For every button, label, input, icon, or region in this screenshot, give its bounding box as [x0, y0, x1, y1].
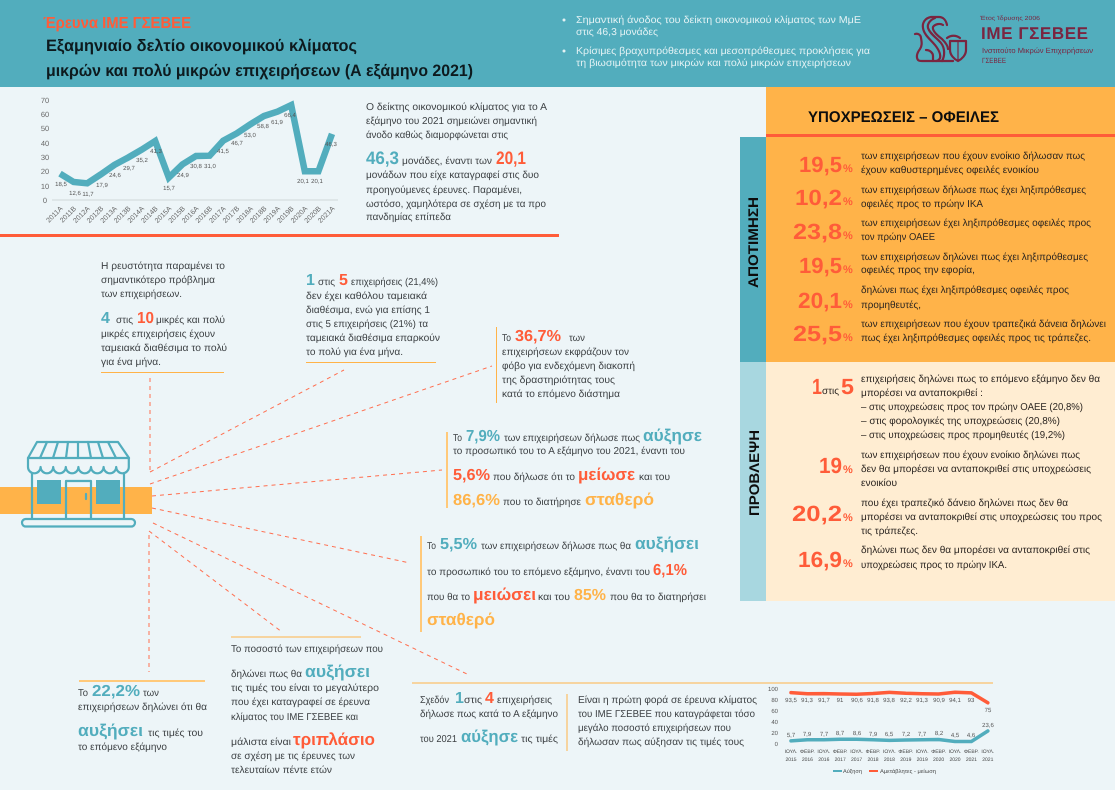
stat 1 in 5 cannot meet obligations — [812, 374, 1100, 441]
side tab: assessment — [740, 137, 766, 362]
line chart: economic climate index: 30,8 — [190, 163, 202, 170]
text block: staffing first half 2021: Το — [453, 433, 462, 444]
line chart: price changes: 2021 — [982, 757, 994, 763]
text block: almost 1 in 4 raised prices: Σχεδόν — [420, 695, 449, 706]
line chart: economic climate index: 2012B — [86, 205, 105, 225]
stat 25,5% banks: % — [843, 332, 853, 344]
text block: staffing first half 2021: και του — [639, 472, 670, 483]
stat 19% rent: % — [843, 464, 853, 476]
line chart: economic climate index: 46,3 — [325, 141, 337, 148]
line chart: economic climate index: 70 — [41, 96, 49, 105]
text block: almost 1 in 4 raised prices: επιχειρήσεις — [497, 695, 552, 706]
line chart: price changes: 23,6 — [982, 722, 994, 729]
text block: highest recorded price rises: τις τιμές του είναι το μεγαλύτερο — [231, 683, 379, 694]
text block: almost 1 in 4 raised prices — [420, 690, 558, 746]
title — [46, 37, 473, 80]
stat 1 in 5 cannot meet obligations: – στις φορολογικές της υποχρεώσεις (20,8%) — [861, 416, 1060, 427]
text block: highest recorded price rises: σε σχέση με τις έρευνες των — [231, 751, 355, 762]
line chart: price changes: ΦΕΒΡ. — [833, 749, 848, 755]
line chart: price changes: 20 — [771, 730, 779, 737]
text block: liquidity: Η ρευστότητα παραμένει το — [101, 261, 225, 272]
icon: storefront — [22, 442, 135, 526]
chart legend — [833, 768, 936, 775]
stat 1 in 5 cannot meet obligations: μπορέσει να ανταποκριθεί : — [861, 388, 983, 399]
stat 19,5% tax: των επιχειρήσεων δηλώνει πως έχει ληξιπρόθεσμες — [861, 252, 1088, 263]
text block: highest recorded price rises: μάλιστα είναι — [231, 737, 291, 748]
stat 19% rent: των επιχειρήσεων που έχουν ενοίκιο δηλώνει πως — [861, 450, 1080, 461]
line chart: economic climate index: 2011B — [59, 205, 78, 224]
text block: 1 in 5 no cash: 5 — [339, 272, 348, 289]
text block: 22,2% will raise prices — [78, 680, 207, 753]
stat 20,2% bank loans: % — [843, 512, 853, 524]
stat 1 in 5 cannot meet obligations: 5 — [841, 374, 854, 399]
text block: first time in climate survey: του ΙΜΕ ΓΣΕΒΕΕ που καταγράφεται τόσο — [578, 709, 755, 720]
text block: highest recorded price rises: που έχει καταγραφεί σε έρευνα — [231, 697, 370, 708]
header key points: τη βιωσιμότητα των μικρών και πολύ μικρών επιχειρήσεων — [576, 58, 851, 69]
text block: liquidity: στις — [116, 315, 133, 326]
line chart: price changes — [768, 686, 994, 775]
stat 20,2% bank loans: μπορέσει να ανταποκριθεί στις υποχρεώσεις του προς — [861, 512, 1102, 523]
chart legend: Αύξηση — [843, 768, 862, 775]
line chart: economic climate index: 2017B — [222, 205, 241, 225]
stat 16,9% IKA: δηλώνει πως δεν θα μπορέσει να ανταποκριθεί στις — [861, 545, 1090, 556]
text block: staffing first half 2021: 7,9% — [466, 428, 500, 445]
logo — [915, 15, 1093, 65]
line chart: price changes: 91,3 — [801, 697, 813, 704]
text block: liquidity: μικρές επιχειρήσεις έχουν — [101, 329, 215, 340]
stat 16,9% IKA — [798, 545, 1090, 572]
stat 20,1% suppliers: δηλώνει πως έχει ληξιπρόθεσμες οφειλές προς — [861, 285, 1069, 296]
line chart: price changes: ΦΕΒΡ. — [866, 749, 880, 755]
stat 10,2% IKA: οφειλές προς το πρώην ΙΚΑ — [861, 199, 983, 210]
stat 10,2% IKA: 10,2 — [795, 185, 842, 210]
text block: 1 in 5 no cash: το πολύ για ένα μήνα. — [306, 347, 403, 358]
line chart: economic climate index: 20 — [41, 167, 49, 176]
text block: first time in climate survey: Είναι η πρώτη φορά σε έρευνα κλίματος — [578, 695, 757, 706]
line chart: economic climate index: 24,9 — [177, 172, 189, 179]
stat 19,5% tax: % — [843, 264, 853, 276]
stat 23,8% OAEE: 23,8 — [793, 219, 842, 244]
text block: highest recorded price rises: δηλώνει πως θα — [231, 669, 302, 680]
line chart: price changes: 2018 — [867, 757, 879, 763]
text block: 36,7% fear of closure: Το — [502, 333, 511, 344]
line chart: economic climate index: 30 — [41, 153, 49, 162]
line chart: price changes: 6,5 — [885, 731, 894, 738]
stat 10,2% IKA: % — [843, 196, 853, 208]
text block: first time in climate survey — [566, 694, 757, 751]
stat 19% rent: 19 — [819, 453, 842, 478]
stat 25,5% banks: πως έχει ληξιπρόθεσμες οφειλές προς τις τράπεζες. — [861, 333, 1091, 344]
line chart: price changes: 93 — [968, 697, 975, 704]
text block: 22,2% will raise prices: 22,2% — [92, 683, 140, 700]
text block: liquidity: 4 — [101, 310, 110, 327]
text block: staffing first half 2021: των επιχειρήσεων δήλωσε πως — [504, 433, 640, 444]
stat 25,5% banks: 25,5 — [793, 321, 842, 346]
text block: 1 in 5 no cash: 1 — [306, 272, 315, 289]
stat 20,2% bank loans: 20,2 — [792, 501, 842, 526]
header key points: στις 46,3 μονάδες — [576, 27, 658, 38]
line chart: economic climate index: 12,6 — [69, 190, 81, 197]
line chart: price changes: 2020 — [949, 757, 961, 763]
text block: liquidity: μικρές και πολύ — [156, 315, 225, 326]
text: index commentary: άνοδο καθώς διαμορφώνεται στις — [366, 130, 508, 141]
title: Εξαμηνιαίο δελτίο οικονομικού κλίματος — [46, 37, 357, 55]
line chart: price changes: 2016 — [818, 757, 830, 763]
line chart: price changes: 60 — [771, 708, 779, 715]
text block: staffing next half — [420, 534, 706, 632]
panel: forecast — [740, 362, 1115, 601]
stat 23,8% OAEE: τον πρώην ΟΑΕΕ — [861, 232, 935, 243]
text block: almost 1 in 4 raised prices: του 2021 — [420, 734, 457, 745]
line chart: price changes: 2021 — [966, 757, 977, 763]
text: index commentary: προηγούμενες έρευνες. Παραμένει, — [366, 185, 522, 196]
line chart: price changes: 90,6 — [851, 697, 863, 704]
text block: staffing next half: μειώσει — [473, 585, 536, 604]
text block: staffing next half: το προσωπικό του το επόμενο εξάμηνο, έναντι του — [427, 567, 650, 578]
line chart: economic climate index: 2012A — [72, 205, 92, 225]
line chart: economic climate index: 18,5 — [55, 181, 67, 188]
text block: staffing next half: και του — [538, 592, 570, 603]
text: index commentary: ωστόσο, χαμηλότερα σε σχέση με τα προ — [366, 199, 546, 210]
text block: 22,2% will raise prices: Το — [78, 688, 88, 699]
line chart: economic climate index: 2017A — [208, 205, 228, 225]
line chart: economic climate index: 2019A — [263, 205, 282, 225]
stat 16,9% IKA: 16,9 — [798, 547, 842, 572]
line chart: economic climate index: 10 — [41, 182, 49, 191]
line chart: price changes: 80 — [771, 697, 779, 704]
stat 23,8% OAEE: των επιχειρήσεων έχει ληξιπρόθεσμες οφειλές προς — [861, 218, 1091, 229]
line chart: price changes: ΦΕΒΡ. — [931, 749, 946, 755]
text block: liquidity: ταμειακά διαθέσιμα το πολύ — [101, 343, 227, 354]
line chart: economic climate index: 20,1 — [297, 178, 309, 185]
text block: 36,7% fear of closure: της δραστηριότητας τους — [502, 375, 615, 386]
text block: liquidity: 10 — [137, 310, 154, 327]
line chart: price changes: ΦΕΒΡ. — [898, 749, 913, 755]
text block: 22,2% will raise prices: το επόμενο εξάμηνο — [78, 742, 167, 753]
line chart: price changes: 93,5 — [785, 697, 797, 704]
line chart: price changes: 2015 — [785, 757, 797, 763]
stat 20,1% suppliers: 20,1 — [798, 288, 842, 313]
text block: 22,2% will raise prices: επιχειρήσεων δηλώνει ότι θα — [78, 702, 207, 713]
logo wordmark — [979, 15, 1093, 65]
text block: staffing next half: που θα το — [427, 592, 470, 603]
text block: 22,2% will raise prices: των — [143, 688, 159, 699]
text block: staffing next half: των επιχειρήσεων δήλωσε πως θα — [481, 541, 631, 552]
text block: first time in climate survey: δήλωσαν πως αύξησαν τις τιμές τους — [578, 737, 744, 748]
line chart: economic climate index: 2016B — [195, 205, 214, 225]
text block: highest recorded price rises: Το ποσοστό των επιχειρήσεων που — [231, 644, 383, 655]
text block: 22,2% will raise prices: αυξήσει — [78, 721, 143, 740]
line chart: economic climate index: 31,0 — [204, 163, 216, 170]
text block: 1 in 5 no cash — [306, 272, 440, 363]
line chart: price changes: 4,6 — [967, 732, 976, 739]
line chart: economic climate index: 41,3 — [150, 148, 162, 155]
text block: almost 1 in 4 raised prices: στις — [464, 695, 482, 706]
text block: almost 1 in 4 raised prices: τις τιμές — [521, 734, 558, 745]
stat 10,2% IKA — [795, 185, 1086, 210]
text block: almost 1 in 4 raised prices: 4 — [485, 690, 494, 707]
text: index commentary: Ο δείκτης οικονομικού κλίματος για το Α — [366, 102, 547, 113]
text block: staffing next half: που θα το διατηρήσει — [610, 592, 706, 603]
stat 20,2% bank loans: που έχει τραπεζικό δάνειο δηλώνει πως δεν θα — [861, 498, 1068, 509]
line chart: economic climate index: 2011A — [46, 205, 65, 224]
text block: almost 1 in 4 raised prices: δήλωσε πως κατά το Α εξάμηνο — [420, 709, 558, 720]
text block: highest recorded price rises: τελευταίων πέντε ετών — [231, 765, 332, 776]
line chart: price changes: 5,7 — [787, 732, 796, 739]
text: index commentary: εξάμηνο του 2021 σημειώνει σημαντική — [366, 116, 537, 127]
text block: 1 in 5 no cash: ταμειακά διαθέσιμα επαρκούν — [306, 333, 440, 344]
chart legend: Αμετάβλητες - μείωση — [880, 768, 936, 775]
text block: 1 in 5 no cash: επιχειρήσεις (21,4%) — [351, 277, 438, 288]
text block: 36,7% fear of closure: επιχειρήσεων εκφράζουν τον — [502, 347, 629, 358]
text block: 36,7% fear of closure: 36,7% — [515, 328, 561, 345]
text: index commentary: 46,3 — [366, 148, 399, 168]
line chart: price changes: ΙΟΥΛ. — [785, 749, 797, 755]
line chart: economic climate index: 0 — [43, 196, 47, 205]
header key points: Κρίσιμες βραχυπρόθεσμες και μεσοπρόθεσμες προκλήσεις για — [576, 46, 870, 57]
stat 19,5% tax: 19,5 — [799, 253, 842, 278]
panel heading: ΥΠΟΧΡΕΩΣΕΙΣ – ΟΦΕΙΛΕΣ — [808, 109, 999, 126]
line chart: price changes: 2018 — [884, 757, 895, 763]
line chart: price changes: 7,9 — [869, 731, 878, 738]
line chart: economic climate index: 2015B — [168, 205, 187, 225]
text block: 22,2% will raise prices: τις τιμές του — [148, 728, 203, 739]
line chart: price changes: 8,6 — [853, 730, 862, 737]
stat 25,5% banks — [793, 319, 1106, 346]
line chart: price changes: 8,7 — [836, 730, 845, 737]
line chart: economic climate index: 2018B — [249, 205, 269, 225]
line chart: economic climate index: 41,5 — [217, 148, 229, 155]
line chart: price changes: 7,7 — [918, 731, 927, 738]
line chart: price changes: 94,1 — [949, 697, 961, 704]
line chart: price changes: 92,2 — [900, 697, 912, 704]
header key points — [562, 15, 870, 69]
line chart: price changes: 4,5 — [951, 732, 960, 739]
line chart: economic climate index: 2019B — [276, 205, 296, 225]
line chart: economic climate index: 29,7 — [123, 165, 135, 172]
text block: staffing first half 2021: μείωσε — [578, 465, 635, 484]
stat 10,2% IKA: των επιχειρήσεων δήλωσε πως έχει ληξιπρόθεσμες — [861, 185, 1086, 196]
line chart: economic climate index: 2020B — [304, 205, 323, 225]
text block: staffing next half: Το — [427, 541, 436, 552]
line chart: price changes: 91,8 — [867, 697, 879, 704]
stat 19,5% rent: 19,5 — [799, 152, 842, 177]
stat 25,5% banks: των επιχειρήσεων που έχουν τραπεζικά δάνεια δηλώνει — [861, 319, 1106, 330]
line chart: economic climate index: 2016A — [181, 205, 201, 225]
stat 23,8% OAEE: % — [843, 230, 853, 242]
line chart: economic climate index: 2021A — [317, 205, 337, 225]
stat 1 in 5 cannot meet obligations: – στις υποχρεώσεις προς προμηθευτές (19,2%) — [861, 430, 1065, 441]
text block: 36,7% fear of closure — [496, 327, 635, 403]
line chart: price changes: 2017 — [851, 757, 862, 763]
stat 19,5% rent — [799, 151, 1085, 177]
stat 1 in 5 cannot meet obligations: 1 — [812, 374, 822, 399]
title: μικρών και πολύ μικρών επιχειρήσεων (Α εξάμηνο 2021) — [46, 62, 473, 80]
icon: lion and shield — [915, 17, 966, 61]
stat 19,5% rent: των επιχειρήσεων που έχουν ενοίκιο δήλωσαν πως — [861, 151, 1085, 162]
line chart: economic climate index: 53,0 — [244, 132, 256, 139]
line chart: price changes: 91,7 — [818, 697, 830, 704]
line chart: price changes: ΙΟΥΛ. — [981, 749, 994, 755]
stat 20,2% bank loans: τις τράπεζες. — [861, 526, 918, 537]
line chart: economic climate index: 2018A — [236, 205, 255, 225]
dashed connector lines — [149, 366, 492, 675]
line chart: price changes: ΙΟΥΛ. — [949, 749, 961, 755]
line chart: price changes: 91,3 — [916, 697, 928, 704]
text: index commentary — [366, 102, 547, 223]
text block: 1 in 5 no cash: στις — [318, 277, 335, 288]
line chart: price changes: 100 — [768, 686, 779, 693]
line chart: price changes: ΙΟΥΛ. — [817, 749, 830, 755]
stat 20,1% suppliers — [798, 285, 1069, 313]
line chart: price changes: ΦΕΒΡ. — [964, 749, 979, 755]
line chart: economic climate index: 17,9 — [96, 182, 108, 189]
line chart: economic climate index: 2013A — [100, 205, 119, 225]
stat 20,1% suppliers: % — [843, 299, 853, 311]
text block: almost 1 in 4 raised prices: αύξησε — [461, 727, 518, 746]
line chart: economic climate index: 2014B — [140, 205, 160, 225]
text: index commentary: πανδημίας επίπεδα — [366, 212, 451, 223]
line chart: economic climate index: 60 — [41, 110, 49, 119]
text block: staffing next half: 5,5% — [440, 536, 477, 553]
logo wordmark: Ινστιτούτο Μικρών Επιχειρήσεων — [982, 46, 1093, 55]
stat 1 in 5 cannot meet obligations: επιχειρήσεις δηλώνει πως το επόμενο εξάμηνο δεν θα — [861, 374, 1100, 385]
text block: staffing first half 2021: 5,6% — [453, 467, 490, 484]
text block: staffing next half: σταθερό — [427, 610, 495, 629]
line chart: economic climate index — [41, 96, 338, 225]
text block: staffing first half 2021: 86,6% — [453, 492, 500, 509]
line chart: price changes: 2019 — [900, 757, 912, 763]
line chart: price changes: 91 — [837, 697, 844, 704]
line chart: price changes: ΙΟΥΛ. — [916, 749, 929, 755]
text block: staffing first half 2021 — [446, 426, 702, 509]
line chart: economic climate index: 58,8 — [257, 123, 269, 130]
stat 16,9% IKA: % — [843, 558, 853, 570]
text: index commentary: μονάδων που είχε καταγραφεί στις δυο — [366, 170, 539, 181]
line chart: price changes: 7,7 — [820, 731, 829, 738]
line chart: economic climate index: 50 — [41, 124, 49, 133]
line chart: economic climate index: 2015A — [154, 205, 173, 225]
side tab: assessment: ΑΠΟΤΙΜΗΣΗ — [745, 197, 761, 288]
stat 19,5% rent: έχουν καθυστερημένες οφειλές ενοικίου — [861, 165, 1039, 176]
stat 16,9% IKA: υποχρεώσεις προς το πρώην ΙΚΑ. — [861, 560, 1007, 571]
line chart: price changes: 0 — [775, 741, 779, 748]
line chart: economic climate index: 66,4 — [284, 112, 296, 119]
line chart: price changes: 75 — [985, 707, 992, 714]
line chart: economic climate index: 35,2 — [136, 157, 148, 164]
stat 20,2% bank loans — [792, 498, 1102, 537]
logo wordmark: Έτος Ίδρυσης 2006 — [979, 15, 1041, 22]
text block: staffing first half 2021: το προσωπικό του το Α εξάμηνο του 2021, έναντι του — [453, 446, 685, 457]
text block: 36,7% fear of closure: κατά το επόμενο διάστημα — [502, 389, 620, 400]
stat 19,5% tax: οφειλές προς την εφορία, — [861, 265, 975, 276]
stat 19% rent — [819, 450, 1091, 489]
text block: 1 in 5 no cash: δεν έχει καθόλου ταμειακά — [306, 291, 427, 302]
stat 19,5% tax — [799, 252, 1088, 278]
line chart: price changes: ΙΟΥΛ. — [850, 749, 863, 755]
text block: highest recorded price rises — [231, 636, 383, 776]
line chart: price changes: 2017 — [835, 757, 846, 763]
panel: obligations and debts — [740, 87, 1115, 362]
line chart: economic climate index: 2013B — [113, 205, 133, 225]
stat 19,5% rent: % — [843, 163, 853, 175]
stat 1 in 5 cannot meet obligations: – στις υποχρεώσεις προς τον πρώην ΟΑΕΕ (20,8%) — [861, 402, 1083, 413]
logo wordmark: ΓΣΕΒΕΕ — [982, 56, 1006, 65]
side tab: forecast — [740, 362, 766, 601]
text block: liquidity — [101, 261, 227, 373]
line chart: economic climate index: 2014A — [127, 205, 146, 225]
side tab: forecast: ΠΡΟΒΛΕΨΗ — [746, 430, 762, 516]
text block: liquidity: σημαντικότερο πρόβλημα — [101, 275, 215, 286]
text block: highest recorded price rises: αυξήσει — [305, 662, 370, 681]
text block: 36,7% fear of closure: των — [569, 333, 585, 344]
line chart: economic climate index: 2020A — [290, 205, 309, 225]
line chart: price changes: ΦΕΒΡ. — [800, 749, 815, 755]
text block: staffing first half 2021: που δήλωσε ότι το — [493, 472, 575, 483]
line chart: price changes: 7,2 — [902, 731, 911, 738]
line chart: economic climate index: 24,6 — [109, 172, 121, 179]
text block: staffing first half 2021: σταθερό — [585, 490, 654, 509]
line chart: price changes: 2016 — [802, 757, 813, 763]
logo wordmark: ΙΜΕ ΓΣΕΒΕΕ — [981, 24, 1088, 43]
stat 23,8% OAEE — [793, 218, 1091, 244]
stat 19% rent: ενοικίου — [861, 478, 897, 489]
line chart: economic climate index: 11,7 — [82, 191, 94, 198]
header key points: Σημαντική άνοδος του δείκτη οικονομικού κλίματος των ΜμΕ — [576, 15, 861, 26]
text block: 1 in 5 no cash: διαθέσιμα, ενώ για επίσης 1 — [306, 305, 430, 316]
line chart: economic climate index: 15,7 — [163, 185, 175, 192]
text block: 36,7% fear of closure: φόβο για ενδεχόμενη διακοπή — [502, 361, 635, 372]
survey label: Έρευνα ΙΜΕ ΓΣΕΒΕΕ — [43, 15, 191, 32]
text block: almost 1 in 4 raised prices: 1 — [455, 690, 464, 707]
text block: highest recorded price rises: τριπλάσιο — [293, 730, 375, 749]
text block: liquidity: για ένα μήνα. — [101, 357, 161, 368]
text block: staffing next half: αυξήσει — [635, 534, 699, 553]
line chart: economic climate index: 20,1 — [311, 178, 323, 185]
text block: first time in climate survey: μεγάλο ποσοστό επιχειρήσεων που — [578, 723, 731, 734]
text block: staffing next half: 85% — [574, 587, 606, 604]
text block: staffing first half 2021: που το διατήρησε — [503, 497, 582, 508]
header band — [0, 0, 1115, 87]
line chart: price changes: 40 — [771, 719, 779, 726]
stat 1 in 5 cannot meet obligations: στις — [822, 386, 839, 397]
line chart: economic climate index: 61,9 — [271, 119, 283, 126]
line chart: price changes: 90,9 — [933, 697, 945, 704]
text block: highest recorded price rises: κλίματος του ΙΜΕ ΓΣΕΒΕΕ και — [231, 712, 358, 723]
text block: 1 in 5 no cash: στις 5 επιχειρήσεις (21%) τα — [306, 319, 428, 330]
line chart: price changes: ΙΟΥΛ. — [883, 749, 896, 755]
line chart: economic climate index: 46,7 — [231, 140, 243, 147]
stat 19% rent: δεν θα μπορέσει να ανταποκριθεί στις υποχρεώσεις — [861, 464, 1091, 475]
text block: liquidity: των επιχειρήσεων. — [101, 289, 182, 300]
text block: staffing first half 2021: αύξησε — [643, 426, 702, 445]
line chart: price changes: 93,8 — [883, 697, 895, 704]
line chart: price changes: 8,2 — [935, 730, 944, 737]
line chart: price changes: 7,9 — [803, 731, 812, 738]
line chart: price changes: 2019 — [917, 757, 928, 763]
stat 20,1% suppliers: προμηθευτές, — [861, 300, 921, 311]
line chart: economic climate index: 40 — [41, 139, 49, 148]
text: index commentary: 20,1 — [496, 148, 526, 168]
text block: staffing next half: 6,1% — [653, 562, 687, 579]
line chart: price changes: 2020 — [933, 757, 944, 763]
text: index commentary: μονάδες, έναντι των — [402, 156, 492, 167]
